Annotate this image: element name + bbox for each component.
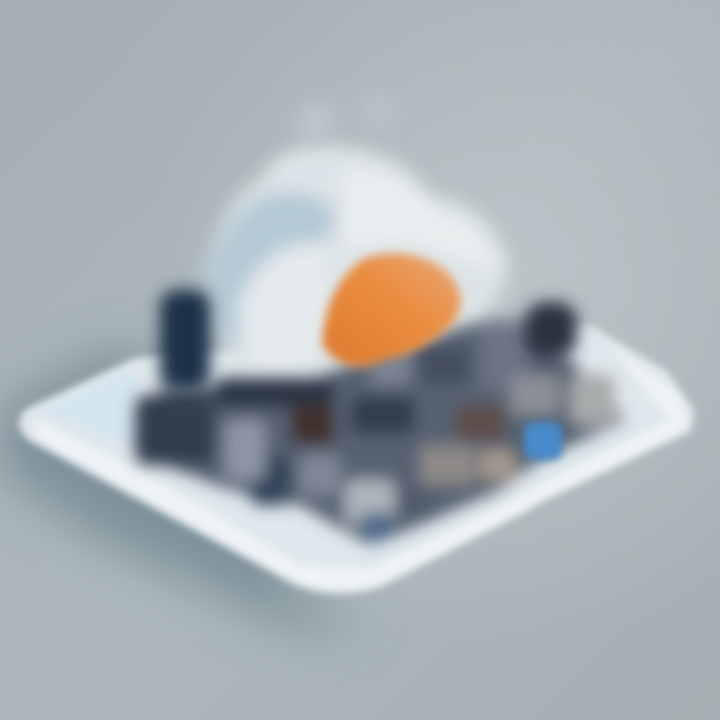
dark block cluster [135, 320, 625, 545]
tray [19, 325, 695, 594]
orange sphere [322, 254, 461, 366]
dark navy pillar [160, 290, 577, 390]
cloud [205, 146, 508, 385]
blue block [524, 422, 562, 460]
tray shadow [0, 350, 370, 630]
floating wisps [301, 98, 390, 138]
